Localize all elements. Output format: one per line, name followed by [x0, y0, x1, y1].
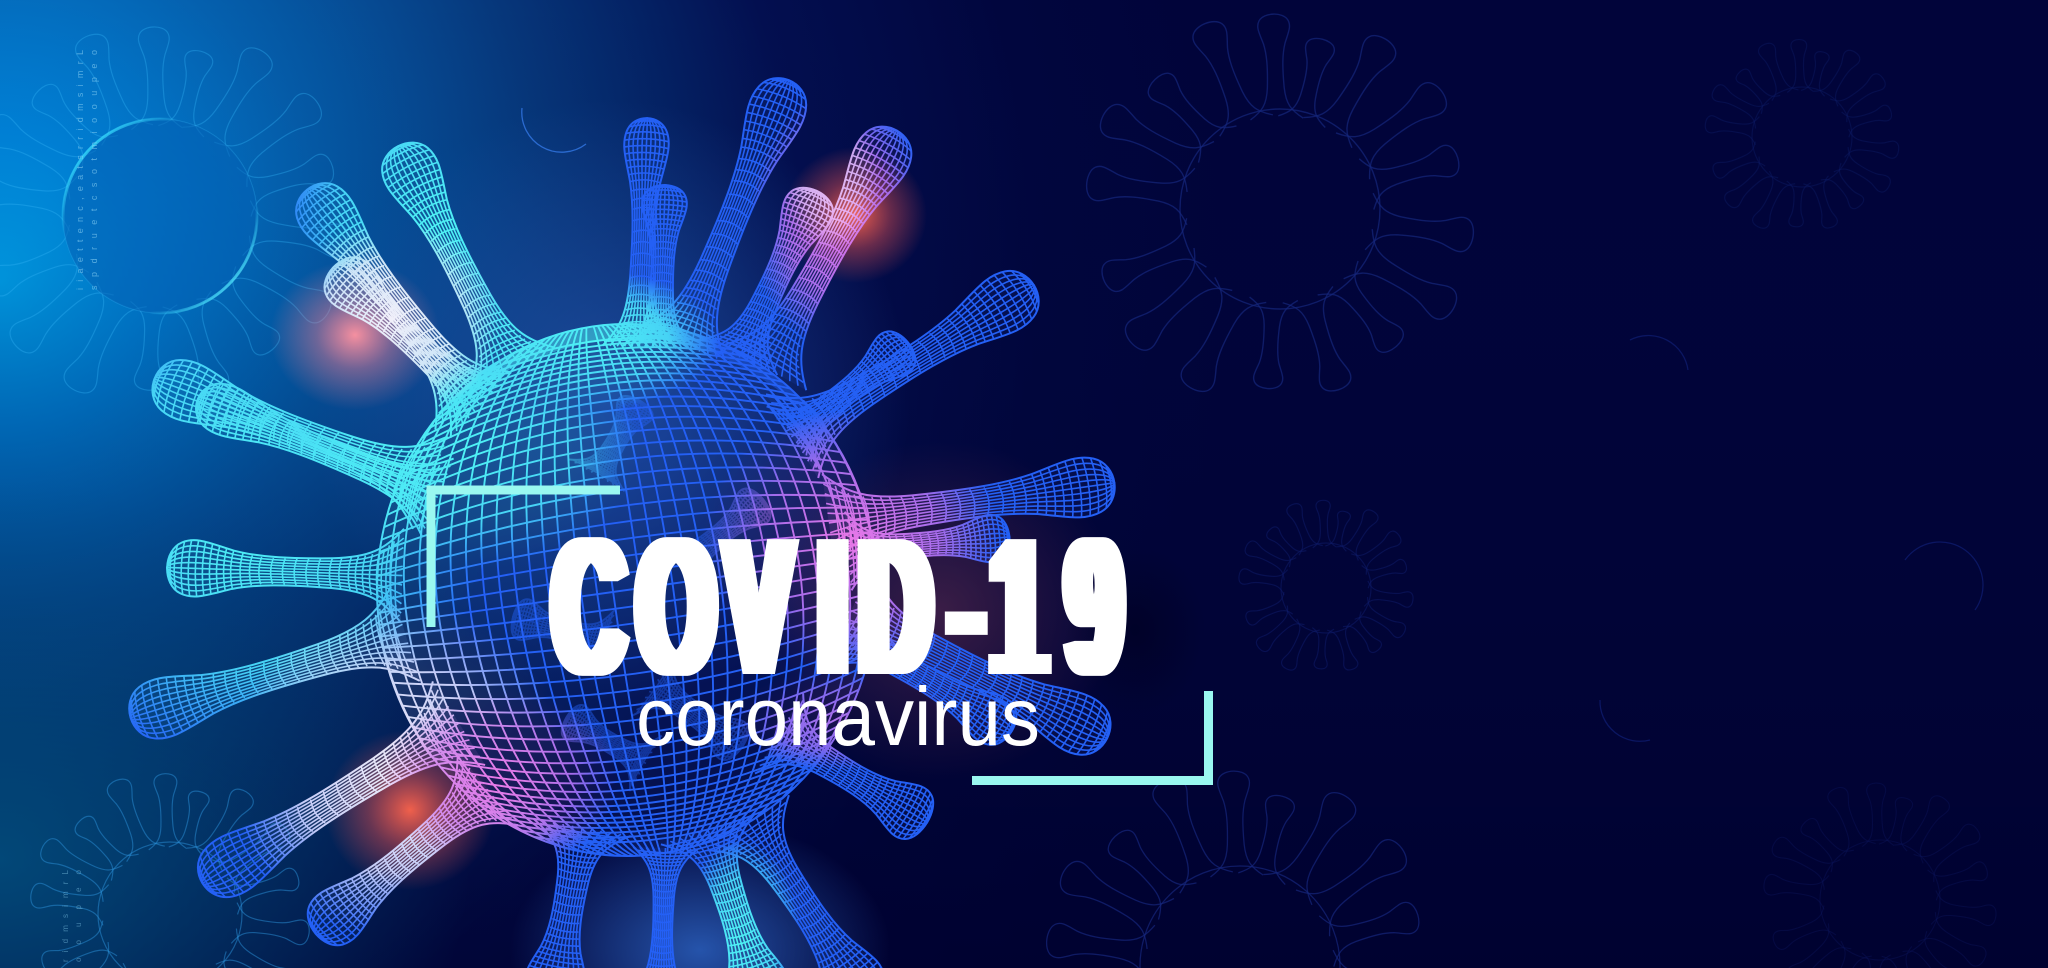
background virus: bottom left	[28, 773, 312, 968]
background virus: top right	[1703, 39, 1901, 233]
background virus: bottom centre right	[1043, 770, 1437, 968]
vertical micro text: top left: i i a e t t e n c , e a t s r r i d m s i m r L	[75, 50, 85, 290]
background virus: top left	[0, 26, 351, 403]
subtitle: coronavirus	[636, 670, 1040, 763]
vertical micro text: top left: s p d r u e t c s o t m i o o u p e o	[89, 50, 99, 290]
glow: red lower left	[325, 730, 495, 890]
glow: pink upper left	[270, 260, 440, 410]
vertical micro text: bottom left	[61, 869, 83, 962]
glow: plum behind title	[760, 440, 1120, 780]
faint crescents	[522, 108, 1983, 741]
background virus: bottom right	[1762, 782, 1998, 968]
bracket: top left	[431, 490, 620, 627]
background virus: upper centre right	[1083, 13, 1477, 401]
bracket: bottom right	[972, 691, 1208, 780]
glow: red upper right	[783, 147, 927, 283]
background virus: centre right	[1237, 500, 1415, 675]
wireframe coronavirus	[128, 77, 1116, 968]
title: COVID-19	[554, 497, 1121, 716]
vertical micro text: bottom left: r i d m s i m r L	[61, 869, 70, 962]
vertical micro text: bottom left: o o u p e o	[74, 869, 83, 962]
shadow behind title	[1065, 545, 1205, 715]
vertical micro text: top left	[75, 50, 99, 290]
